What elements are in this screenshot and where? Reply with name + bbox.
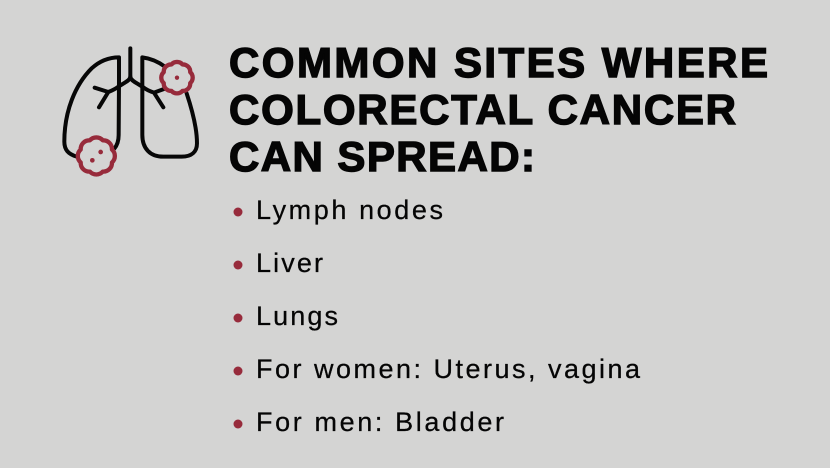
- list item: lungs: Lungs: [256, 301, 338, 331]
- list item: women: For women: Uterus, vagina: [256, 354, 641, 384]
- tumor: upper right: [157, 58, 197, 97]
- list item: lymph nodes: Lymph nodes: [256, 195, 443, 225]
- icon: lungs with tumors: [64, 48, 197, 179]
- tumor: lower left: [73, 133, 120, 179]
- bullet list: [234, 195, 641, 437]
- lung outlines and bronchi: [64, 48, 197, 157]
- list item: liver: Liver: [256, 248, 323, 278]
- title: CAN SPREAD:: [229, 133, 535, 180]
- title: COLORECTAL CANCER: [229, 86, 736, 133]
- title: [229, 39, 768, 180]
- title: COMMON SITES WHERE: [229, 39, 768, 86]
- list item: men: For men: Bladder: [256, 407, 504, 437]
